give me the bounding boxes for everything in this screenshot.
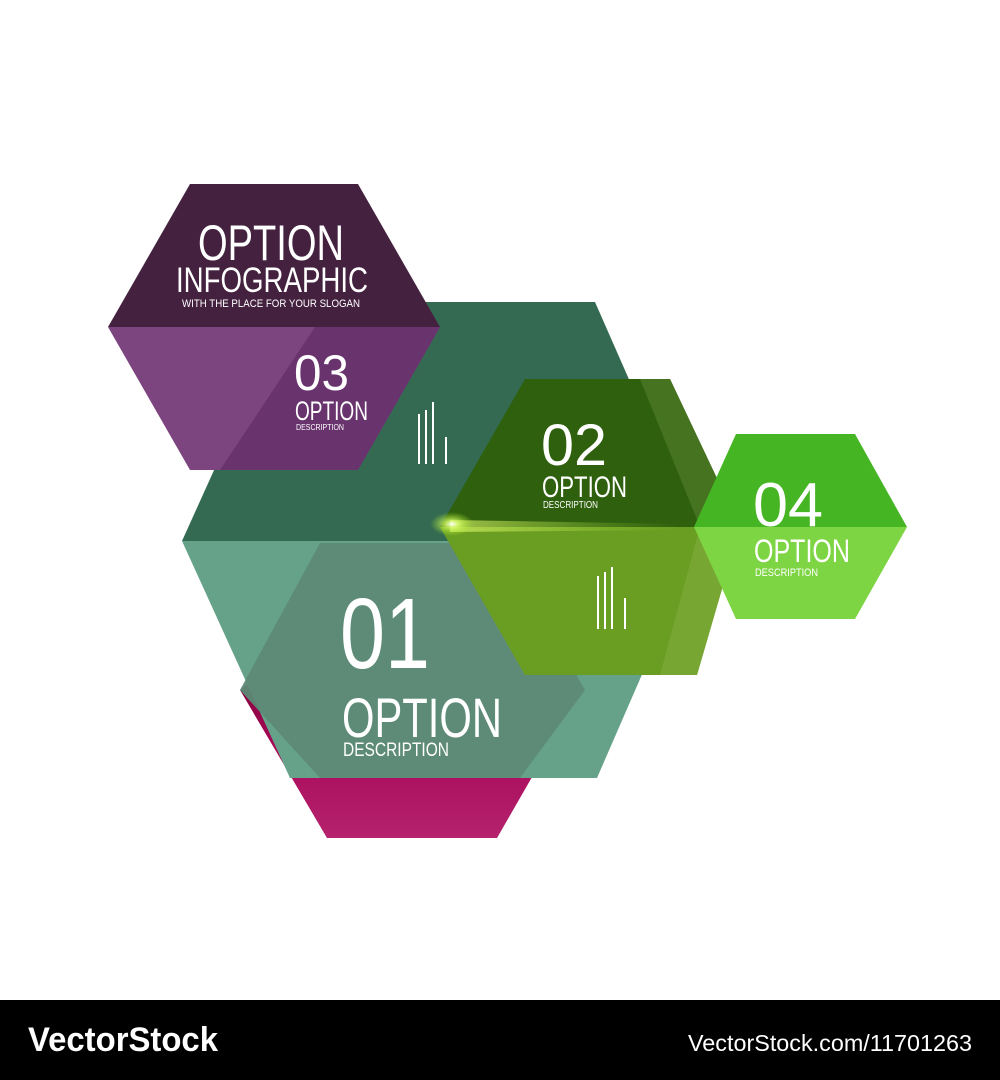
option 03 hexagon: WITH THE PLACE FOR YOUR SLOGAN (182, 298, 360, 310)
option 02 hexagon: 02 (541, 413, 607, 478)
pink hexagon (240, 660, 582, 838)
option 01 hexagon: DESCRIPTION (343, 740, 449, 761)
footer bar (0, 1000, 1000, 1080)
glow highlight (430, 512, 680, 536)
option 01 hexagon (240, 543, 585, 778)
option 04 hexagon: OPTION (754, 533, 850, 569)
option 04 hexagon (694, 434, 907, 619)
option 03 hexagon (108, 184, 440, 470)
option 02 hexagon: DESCRIPTION (543, 500, 598, 511)
option 02 hexagon (440, 379, 740, 675)
option 01 hexagon: OPTION (342, 686, 502, 749)
footer bar: VectorStock (28, 1021, 218, 1059)
option 03 hexagon: 03 (294, 345, 349, 401)
option 03 hexagon: INFOGRAPHIC (176, 261, 368, 300)
option 03 hexagon: DESCRIPTION (296, 423, 344, 432)
option 03 hexagon: OPTION (295, 396, 368, 426)
title: OPTION (198, 215, 344, 271)
icon: bars (419, 402, 446, 464)
option 02 hexagon: OPTION (542, 471, 627, 504)
big green hexagon (182, 302, 700, 778)
option 04 hexagon: 04 (753, 471, 823, 540)
footer bar: VectorStock.com/11701263 (688, 1030, 972, 1056)
option 01 hexagon: 01 (340, 578, 430, 690)
icon: bars (598, 567, 625, 629)
option 04 hexagon: DESCRIPTION (755, 567, 818, 579)
